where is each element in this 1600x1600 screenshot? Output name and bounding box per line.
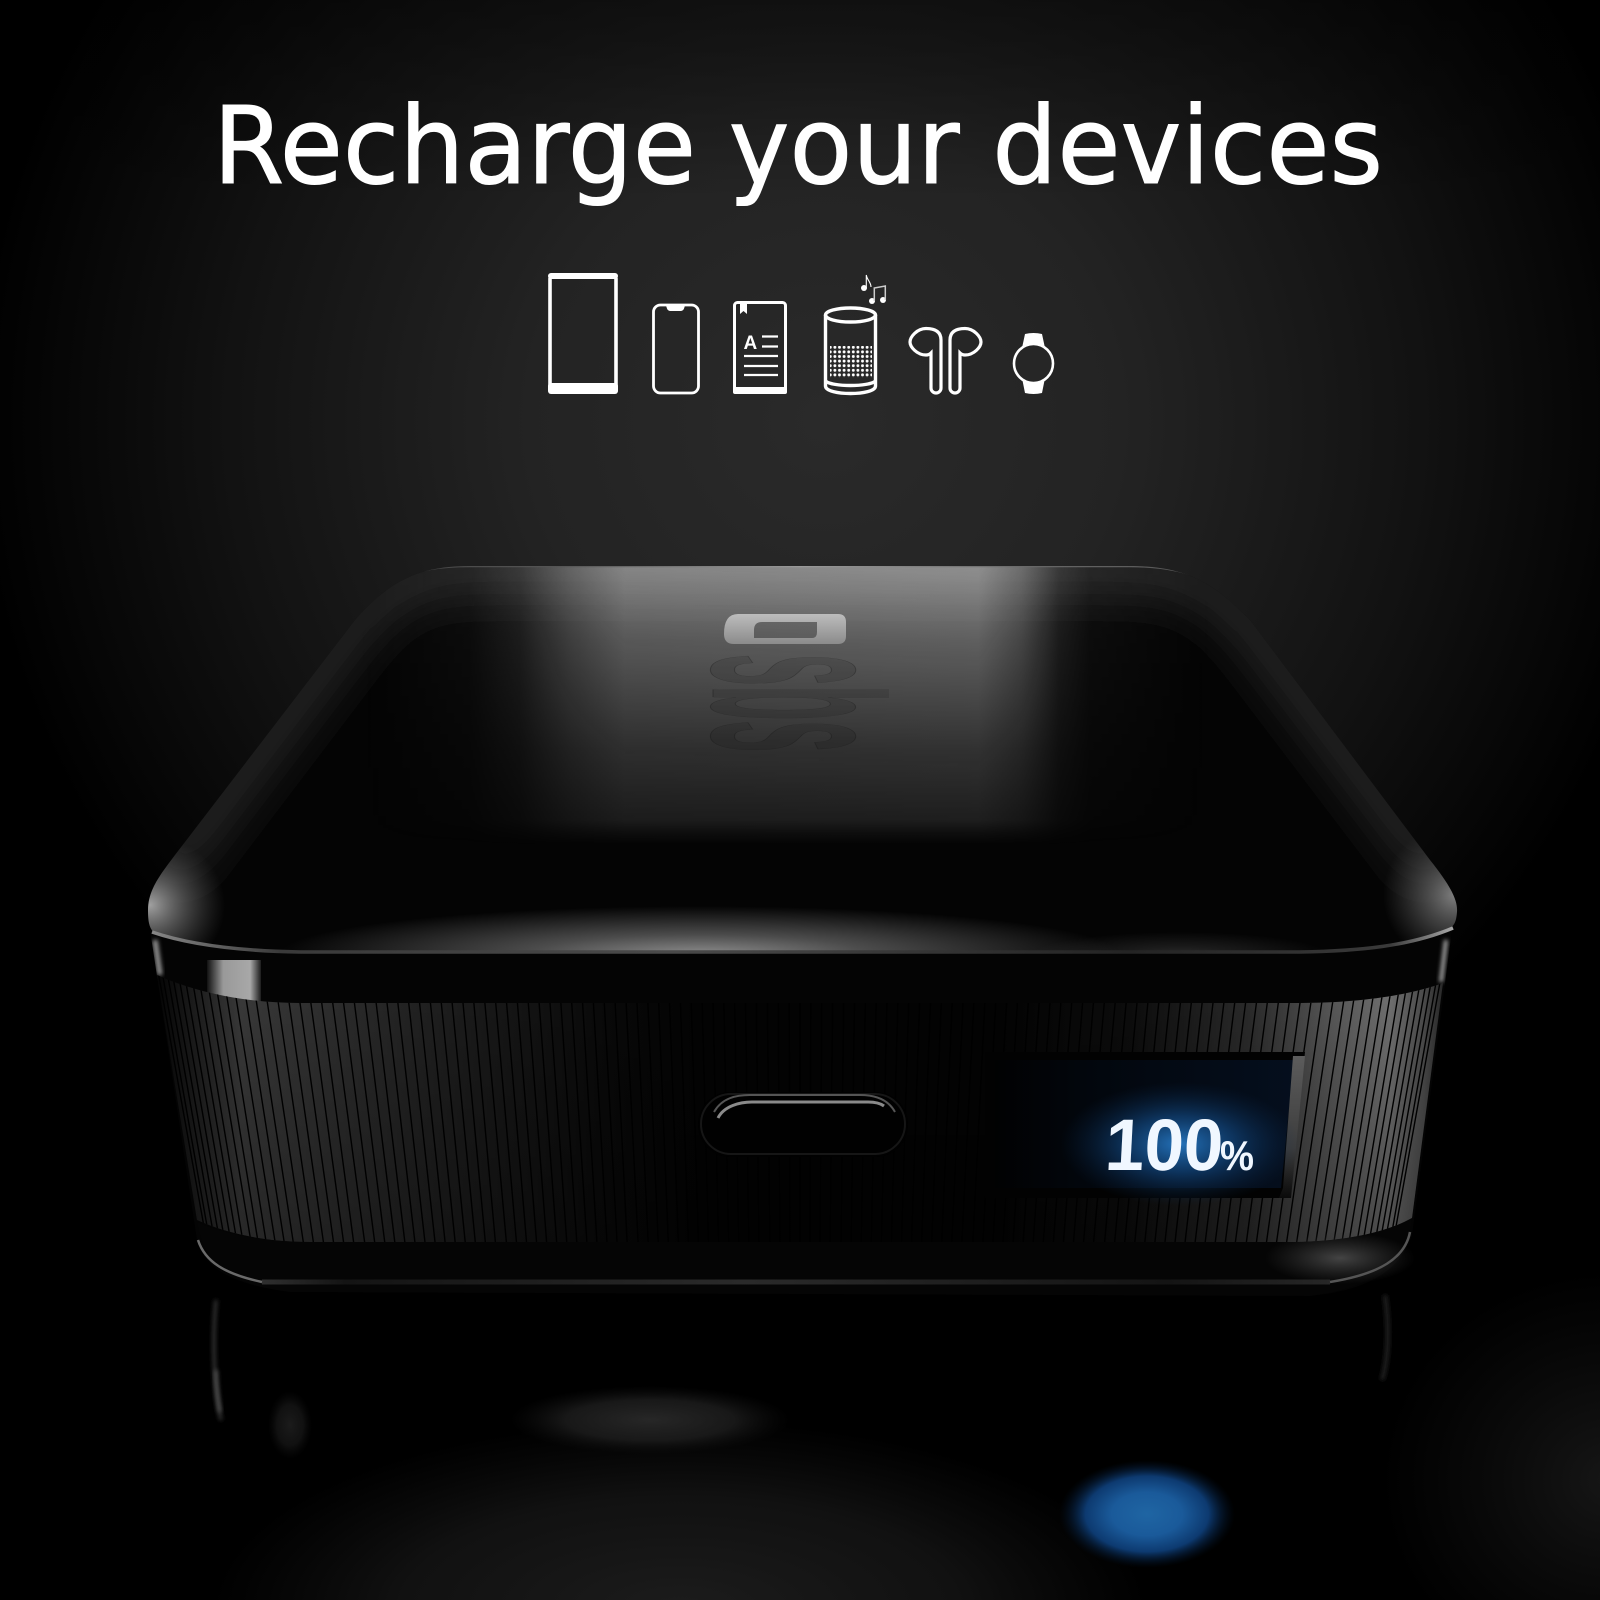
lid [148,566,1458,954]
left edge reflection [214,1300,312,1459]
icon: tablet [548,273,618,394]
body [150,930,1452,1296]
bottom rim [197,1218,1412,1296]
floor shadow [0,1000,1600,1600]
faint port reflection [510,1386,790,1454]
battery level readout: % [1220,1132,1254,1179]
bottom rim light [198,1232,1415,1284]
floor glow lower right [1380,1270,1600,1600]
logo wordmark: sbs [656,654,954,752]
ribbed band [157,975,1443,1242]
icon: e-reader [733,302,787,394]
USB-C port [698,1092,908,1157]
logo: sbs [710,614,889,750]
lid rim line [152,928,1453,952]
logo mark [724,614,846,644]
icon: wireless earbuds [910,328,981,393]
device icons row [548,273,1053,394]
icon: smartphone [654,305,698,393]
floor reflections [214,1295,1388,1568]
top background shading [0,0,1600,200]
display panel [985,1052,1305,1206]
title: Recharge your devices [213,85,1383,209]
display glow [1060,1082,1300,1206]
icon: smart speaker with music notes [826,275,886,394]
floor glow lower middle [210,1420,1150,1600]
upper band specular highlights [155,940,1446,1004]
power bank [148,566,1458,1284]
icon: smartwatch [1014,333,1053,394]
right edge reflection [1382,1295,1388,1380]
lid reflections [148,566,1458,950]
icon: e-reader: A [744,333,758,354]
bevel [1279,1056,1305,1198]
battery level readout: 100 [1103,1105,1225,1186]
blue display reflection [1059,1460,1235,1568]
